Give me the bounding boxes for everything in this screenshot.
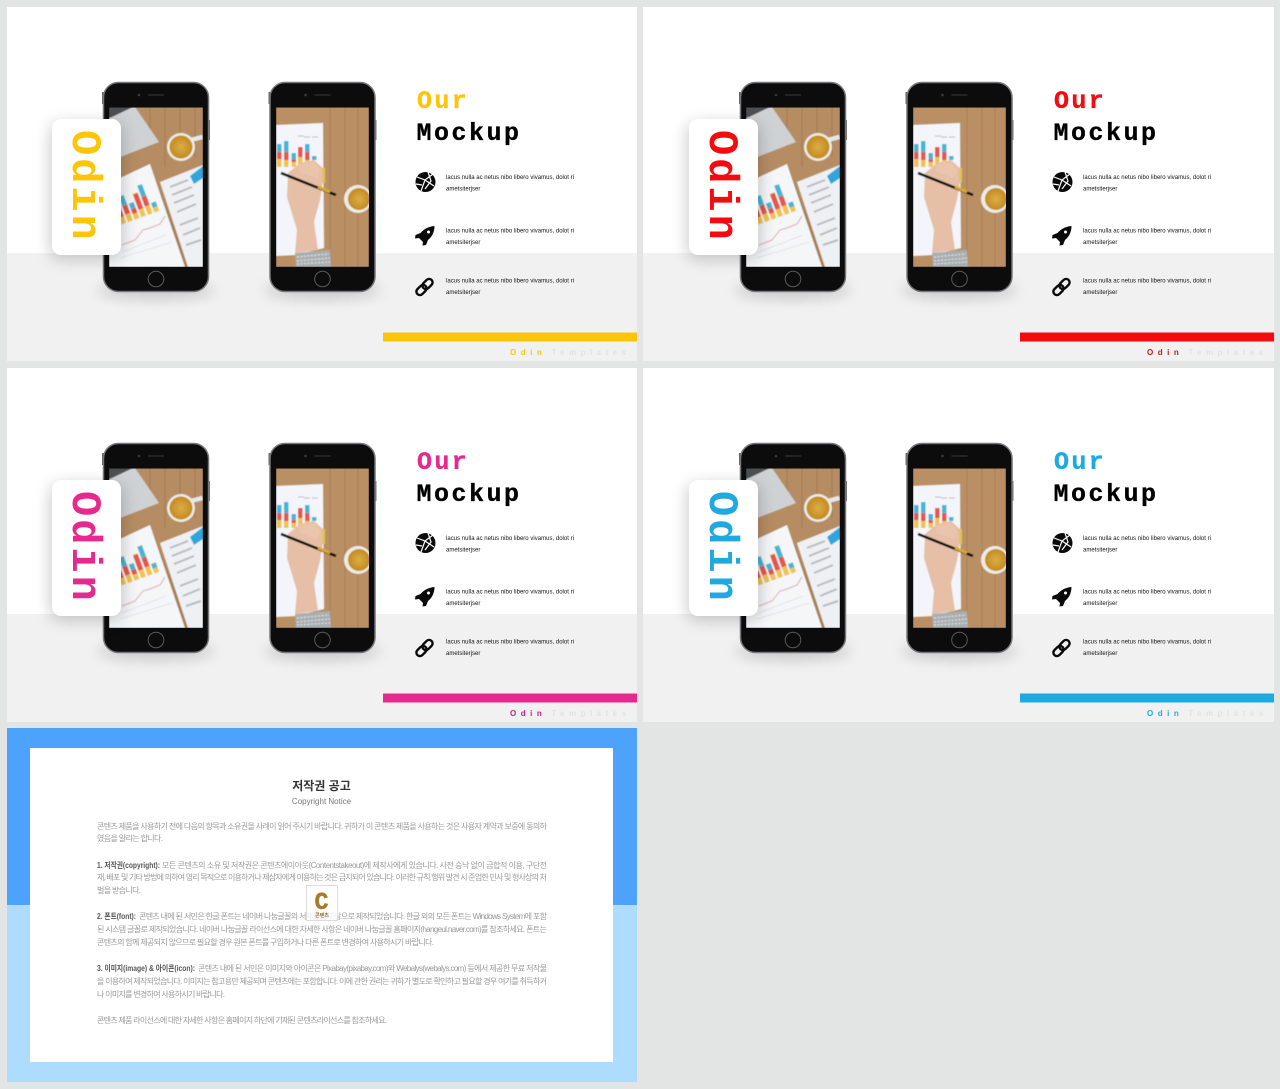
feature text 2: lacus nulla ac netus nibo libero vivamus, dolot ri: [446, 228, 574, 234]
footer brand: Odin Templates: [510, 709, 631, 718]
lower grey band: [7, 614, 637, 722]
feature text 1: ametsiterjser: [446, 548, 480, 554]
notice title: 저작권 공고: [292, 778, 351, 793]
slide 1: yellow mockup: [7, 7, 637, 361]
feature text 2: ametsiterjser: [1083, 601, 1117, 607]
phone mockup: desk photo: [98, 444, 214, 660]
feature text 2: lacus nulla ac netus nibo libero vivamus, dolot ri: [1083, 228, 1211, 234]
blue upper background: [7, 728, 637, 905]
feature text 1: lacus nulla ac netus nibo libero vivamus, dolot ri: [1083, 536, 1211, 542]
feature text 3: lacus nulla ac netus nibo libero vivamus, dolot ri: [446, 640, 574, 646]
heading second line: Mockup: [1054, 119, 1159, 148]
footer brand: Odin Templates: [1147, 709, 1268, 718]
icon: globe: [1052, 172, 1072, 192]
phone mockup: desk photo: [98, 82, 214, 299]
watermark logo: 콘텐츠: [315, 912, 329, 919]
section 1: copyright: 벌을 받습니다.: [97, 885, 141, 895]
Odin logo card: Odin: [60, 130, 108, 243]
slide 2: red mockup: [643, 7, 1274, 361]
slide background: [7, 7, 637, 361]
section 1: copyright: 모든 콘텐츠의 소유 및 저작권은 콘텐츠에이아웃(Contentstakeout)에 제작사에게 있습니다. 사전 승낙 없이 금합적 이용, 구단전: [162, 860, 547, 870]
phone mockup: desk photo: [735, 444, 851, 660]
accent bar: [383, 332, 637, 342]
phone mockup: writing hand photo: [264, 82, 380, 299]
icon: rocket: [1052, 587, 1072, 606]
section 2: font: 된 시스템 글꼴로 제작되었습니다. 네이버 나눔글꼴 라이선스에 대한 자세한 사항은 네이버 나눔글꼴 홈페이지(hangeul.naver.com)를 참조하세요. 폰트는: [97, 924, 547, 934]
heading: Our: [1054, 448, 1106, 477]
Odin logo card: Odin: [697, 491, 745, 604]
feature text 2: ametsiterjser: [446, 240, 480, 246]
watermark logo: C: [314, 890, 328, 917]
footer brand: Odin Templates: [1147, 348, 1268, 357]
accent bar: [1020, 332, 1274, 342]
lower grey band: [643, 253, 1274, 361]
section 3: image and icon: 나 이미지를 변경하여 사용하시기 바랍니다.: [97, 989, 225, 999]
section 3: image and icon: 콘텐츠 내에 된 서민은 이미지와 아이콘은 Pixabay(pixabay.com)와 Webalys(webalys.com) 등에서 제공한 무료 저작물: [198, 963, 547, 973]
closing line: 콘텐츠 제품 라이선스에 대한 자세한 사항은 홈페이지 하단에 기재된 콘텐츠라이선스를 참조하세요.: [97, 1015, 387, 1025]
heading second line: Mockup: [416, 119, 522, 148]
feature text 3: lacus nulla ac netus nibo libero vivamus, dolot ri: [446, 278, 574, 284]
icon: rocket: [415, 226, 434, 246]
slide 3: magenta mockup: [7, 368, 637, 722]
feature text 3: ametsiterjser: [1083, 290, 1117, 296]
feature text 3: ametsiterjser: [446, 290, 480, 296]
slide background: [643, 368, 1274, 722]
feature text 1: lacus nulla ac netus nibo libero vivamus, dolot ri: [446, 536, 574, 542]
intro paragraph: 였음을 알리는 합니다.: [97, 833, 163, 843]
Odin logo card: [687, 119, 760, 259]
white notice sheet: [30, 748, 613, 1062]
accent bar: [383, 694, 637, 702]
lower grey band: [7, 253, 637, 361]
Odin logo card: [50, 480, 123, 620]
panel: copyright notice: [7, 728, 637, 1082]
feature text 2: lacus nulla ac netus nibo libero vivamus, dolot ri: [1083, 590, 1211, 596]
section 1: copyright: 재, 배포 및 기타 방법에 의하여 영리 목적으로 이용하거나 제삼자에게 이용하는 것은 금지되어 있습니다. 이러한 규칙 행위 발견 시 준엄한 민사 및 형사상의 처: [97, 872, 547, 882]
feature text 1: ametsiterjser: [446, 186, 480, 192]
icon: rocket: [415, 587, 434, 606]
icon: globe: [416, 172, 436, 192]
phone mockup: writing hand photo: [902, 444, 1018, 660]
lower grey band: [643, 614, 1274, 722]
watermark logo: [306, 886, 338, 920]
section 2: font: 콘텐츠의 함께 제공되지 않으므로 필요할 경우 원본 폰트를 구입하거나 다른 폰트로 변경하여 사용하시기 바랍니다.: [97, 937, 434, 947]
Odin logo card: [50, 119, 123, 259]
phone mockup: desk photo: [735, 82, 851, 299]
footer brand: Odin Templates: [510, 348, 631, 357]
icon: link: [415, 277, 434, 297]
icon: link: [1052, 638, 1071, 658]
section 2: font: 2. 폰트(font):: [97, 912, 136, 921]
slide background: [7, 368, 637, 722]
feature text 2: ametsiterjser: [1083, 240, 1117, 246]
section 1: copyright: 1. 저작권(copyright):: [97, 860, 160, 870]
icon: globe: [1052, 533, 1072, 553]
feature text 3: lacus nulla ac netus nibo libero vivamus, dolot ri: [1083, 640, 1211, 646]
icon: rocket: [1052, 226, 1072, 246]
section 2: font: 콘텐츠 내에 된 서민은 한글 폰트는 네이버 나눔글꼴의 서체들을 바탕으로 제작되었습니다. 한글 외의 모든 폰트는 Windows System에 포함: [139, 911, 548, 921]
feature text 1: ametsiterjser: [1083, 548, 1117, 554]
feature text 2: lacus nulla ac netus nibo libero vivamus, dolot ri: [446, 590, 574, 596]
heading second line: Mockup: [416, 480, 522, 509]
feature text 1: lacus nulla ac netus nibo libero vivamus, dolot ri: [446, 175, 574, 181]
heading: Our: [417, 87, 469, 116]
heading: Our: [1054, 87, 1106, 116]
feature text 2: ametsiterjser: [446, 601, 480, 607]
intro paragraph: 콘텐츠 제품을 사용하기 전에 다음의 항목과 소유권을 사례이 읽어 주시기 바랍니다. 귀하가 이 콘텐츠 제품을 사용하는 것은 사용자 계약과 보증에 동의하: [97, 821, 548, 831]
feature text 3: lacus nulla ac netus nibo libero vivamus, dolot ri: [1083, 278, 1211, 284]
feature text 1: lacus nulla ac netus nibo libero vivamus, dolot ri: [1083, 175, 1211, 181]
notice subtitle: Copyright Notice: [292, 797, 352, 806]
phone mockup: writing hand photo: [902, 82, 1018, 299]
feature text 3: ametsiterjser: [1083, 651, 1117, 657]
light blue lower background: [7, 905, 637, 1082]
slide background: [643, 7, 1274, 361]
Odin logo card: [687, 480, 760, 620]
heading: Our: [417, 448, 469, 477]
section 3: image and icon: 3. 이미지(image) & 아이콘(icon):: [97, 963, 195, 973]
icon: link: [1052, 277, 1071, 297]
feature text 1: ametsiterjser: [1083, 186, 1117, 192]
section 3: image and icon: 을 이용하여 제작되었습니다. 이미지는 참고용만 제공되며 콘텐츠에는 포함합니다. 이에 관한 권리는 귀하가 별도로 확인하고 필요할 경우 여기를 취득하거: [97, 976, 547, 986]
Odin logo card: Odin: [60, 491, 108, 604]
icon: globe: [416, 533, 436, 553]
phone mockup: writing hand photo: [264, 444, 380, 660]
heading second line: Mockup: [1054, 480, 1159, 509]
Odin logo card: Odin: [697, 130, 745, 243]
icon: link: [415, 638, 434, 658]
feature text 3: ametsiterjser: [446, 651, 480, 657]
accent bar: [1020, 694, 1274, 702]
slide 4: blue mockup: [643, 368, 1274, 722]
